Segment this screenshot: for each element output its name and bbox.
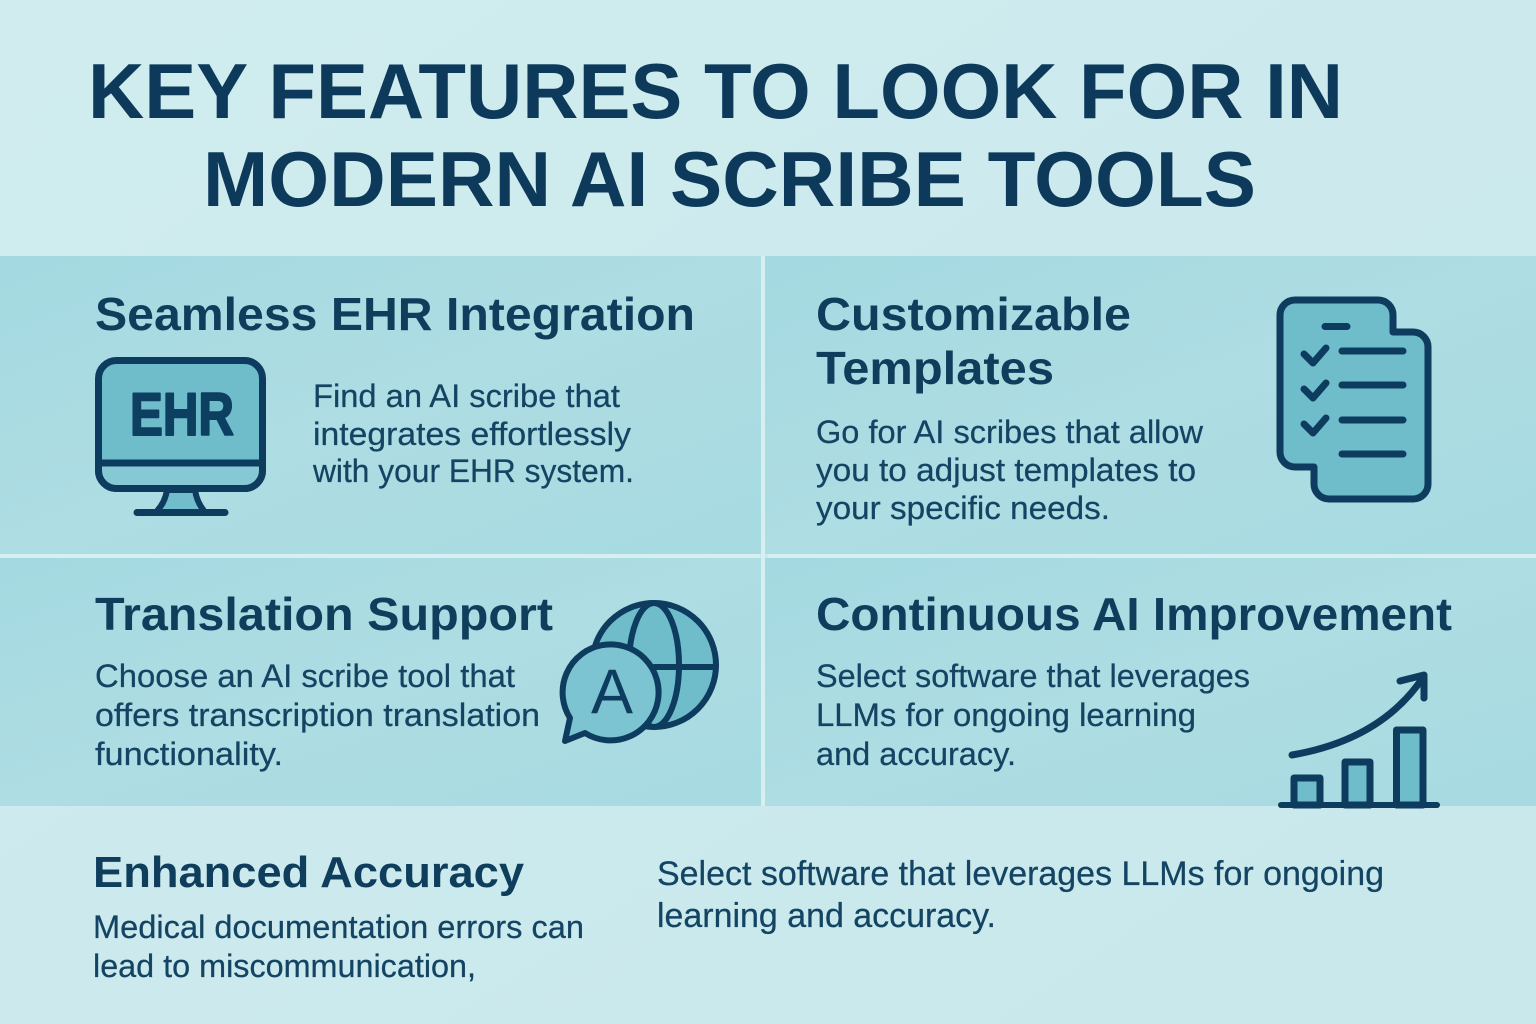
text: seamless EHR description: Find an AI scribe that	[313, 378, 620, 414]
heading: continuous AI improvement: Continuous AI Improvement	[816, 588, 1452, 640]
panel dividers	[0, 256, 1536, 806]
text: improvement description: LLMs for ongoing learning	[816, 697, 1196, 733]
title: KEY FEATURES TO LOOK FOR IN	[88, 47, 1343, 135]
text: seamless EHR description: integrates effortlessly	[313, 416, 631, 452]
icon: EHR monitor: EHR	[130, 381, 234, 448]
text: accuracy side note	[657, 855, 1384, 935]
heading: customizable templates	[816, 288, 1131, 394]
text: seamless EHR description	[312, 378, 634, 489]
text: translation description	[95, 658, 540, 772]
text: translation description: Choose an AI scribe tool that	[95, 658, 515, 694]
icon: document checklist	[1280, 300, 1428, 499]
heading: translation support: Translation Support	[95, 588, 553, 640]
heading: enhanced accuracy: Enhanced Accuracy	[93, 848, 525, 897]
text: accuracy description: lead to miscommunication,	[93, 948, 476, 984]
text: accuracy description: Medical documentation errors can	[93, 909, 584, 945]
icon: growth bar chart with arrow	[1281, 675, 1437, 805]
text: translation description: functionality.	[95, 736, 283, 772]
heading: customizable templates: Templates	[816, 342, 1054, 394]
icon: globe and speech bubble: A	[591, 657, 633, 727]
text: translation description: offers transcription translation	[95, 697, 540, 733]
heading: seamless EHR integration: Seamless EHR Integration	[95, 288, 695, 340]
panel: seamless EHR integration	[0, 256, 761, 554]
text: improvement description	[816, 658, 1250, 772]
text: improvement description: and accuracy.	[816, 736, 1016, 772]
text: templates description: you to adjust templates to	[816, 452, 1196, 488]
text: templates description: Go for AI scribes that allow	[816, 414, 1204, 450]
panel: customizable templates	[765, 256, 1536, 554]
text: templates description: your specific needs.	[816, 490, 1110, 526]
panel: continuous AI improvement	[765, 558, 1536, 806]
text: accuracy side note: Select software that leverages LLMs for ongoing	[657, 855, 1384, 893]
text: improvement description: Select software that leverages	[816, 658, 1250, 694]
heading: customizable templates: Customizable	[816, 288, 1131, 340]
title: MODERN AI SCRIBE TOOLS	[203, 135, 1256, 223]
icon: EHR monitor	[98, 360, 262, 512]
icon: globe and speech bubble	[563, 603, 716, 741]
text: accuracy side note: learning and accuracy.	[657, 897, 996, 935]
text: seamless EHR description: with your EHR system.	[312, 453, 634, 489]
text: accuracy description	[93, 909, 584, 984]
title	[88, 47, 1343, 223]
panel: enhanced accuracy	[93, 848, 1384, 984]
text: templates description	[816, 414, 1204, 526]
panel: translation support	[0, 558, 761, 806]
